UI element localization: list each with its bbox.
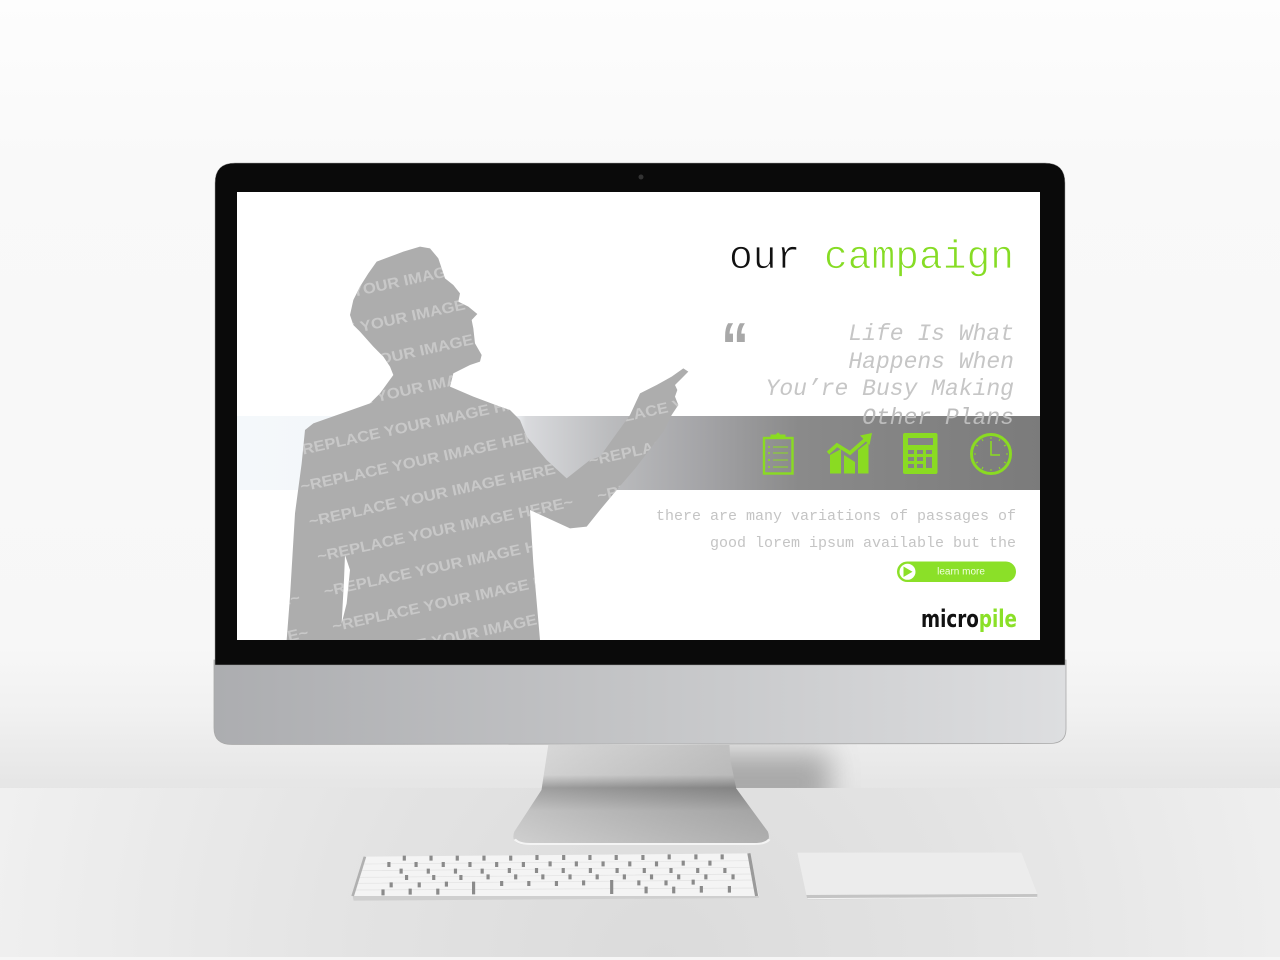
quote text: Life Is What xyxy=(848,321,1014,347)
monitor chin xyxy=(214,660,1066,744)
silhouette with placeholder text: ~REPLACE YOUR IMAGE HERE~ xyxy=(259,249,519,321)
silhouette with placeholder text: ~REPLACE YOUR IMAGE HERE~ xyxy=(331,564,590,636)
bottom photo edge xyxy=(0,957,1280,960)
logo: micropile xyxy=(921,605,1017,633)
silhouette with placeholder text: ~REPLACE YOUR IMAGE HERE~ xyxy=(587,398,847,470)
silhouette with placeholder text: ~REPLACE YOUR IMAGE HERE~ xyxy=(291,389,551,461)
desk surface xyxy=(0,788,1280,960)
silhouette with placeholder text: ~REPLACE YOUR IMAGE HERE~ xyxy=(299,424,559,496)
monitor bezel xyxy=(215,163,1065,665)
body text: good lorem ipsum available but the xyxy=(710,535,1016,552)
body text: there are many variations of passages of xyxy=(656,508,1016,525)
silhouette with placeholder text: ~REPLACE YOUR IMAGE HERE~ xyxy=(307,459,567,531)
silhouette with placeholder text xyxy=(286,246,688,640)
silhouette with placeholder text: ~REPLACE YOUR IMAGE HERE~ xyxy=(316,494,575,566)
silhouette with placeholder text: ~REPLACE YOUR IMAGE HERE~ xyxy=(322,529,582,601)
silhouette with placeholder text: ~REPLACE YOUR IMAGE HERE~ xyxy=(51,624,310,696)
quote mark: “ xyxy=(721,310,749,383)
shadow behind stand xyxy=(687,744,846,788)
silhouette with placeholder text: ~REPLACE YOUR IMAGE HERE~ xyxy=(339,599,598,671)
icon: clipboard xyxy=(764,433,792,474)
body text xyxy=(656,508,1016,552)
grey band xyxy=(237,416,1040,490)
silhouette with placeholder text: ~REPLACE YOUR IMAGE HERE~ xyxy=(596,433,855,505)
keyboard xyxy=(353,853,759,901)
title: our campaign xyxy=(729,235,1014,280)
quote text: Happens When xyxy=(848,349,1014,375)
silhouette with placeholder text: ~REPLACE YOUR IMAGE HERE~ xyxy=(42,589,302,661)
webcam xyxy=(638,174,644,180)
silhouette with placeholder text: ~REPLACE YOUR IMAGE HERE~ xyxy=(283,354,543,426)
button: learn more: learn more xyxy=(937,566,985,578)
icon: growth chart xyxy=(828,433,872,474)
quote text: Other Plans xyxy=(862,405,1014,431)
icon: clock xyxy=(972,434,1010,474)
quote text xyxy=(766,321,1014,431)
silhouette with placeholder text: ~REPLACE YOUR IMAGE HERE~ xyxy=(275,319,535,391)
monitor stand xyxy=(513,745,769,845)
panel: slide screen xyxy=(237,192,1040,640)
silhouette with placeholder text: ~REPLACE YOUR IMAGE HERE~ xyxy=(267,284,527,356)
button: learn more xyxy=(897,562,1016,582)
icon: calculator xyxy=(903,433,938,474)
silhouette with placeholder text: ~REPLACE YOUR IMAGE HERE~ xyxy=(579,363,839,435)
quote text: You’re Busy Making xyxy=(766,376,1014,402)
trackpad xyxy=(797,853,1037,899)
